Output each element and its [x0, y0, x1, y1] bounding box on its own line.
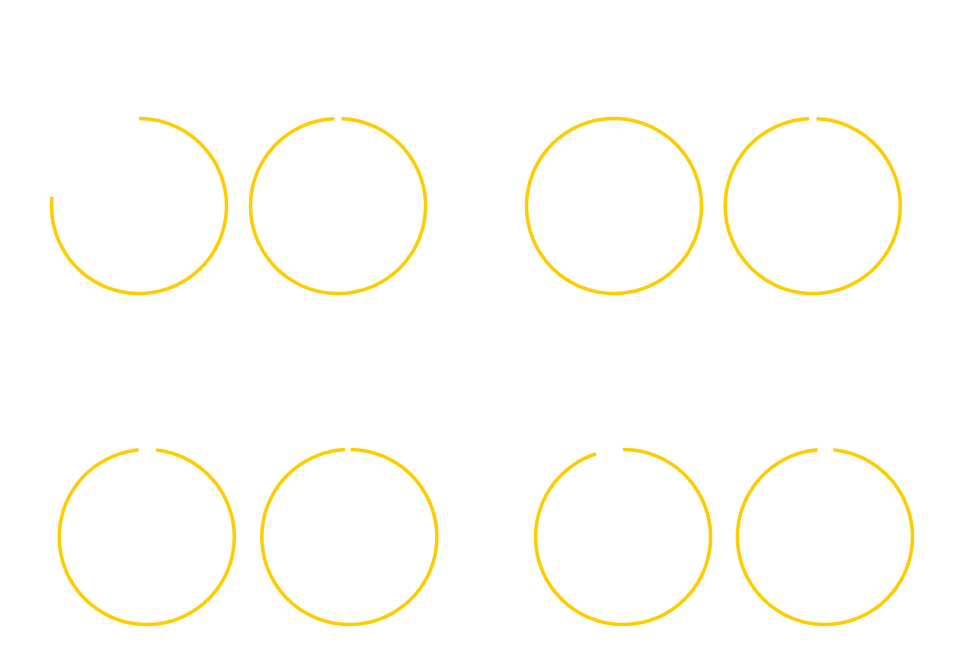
ring 6: bottom-left second: [262, 450, 437, 624]
ring 5: bottom-left: [59, 450, 234, 625]
ring 1: top-left, about 76%: [52, 118, 227, 293]
ring 4: top-right second: [725, 119, 900, 294]
ring 2: top-left second: [250, 119, 426, 294]
ring 8: bottom-right second: [737, 450, 912, 624]
ring 7: bottom-right: [536, 449, 711, 624]
ring 3: top-right full: [526, 118, 702, 294]
